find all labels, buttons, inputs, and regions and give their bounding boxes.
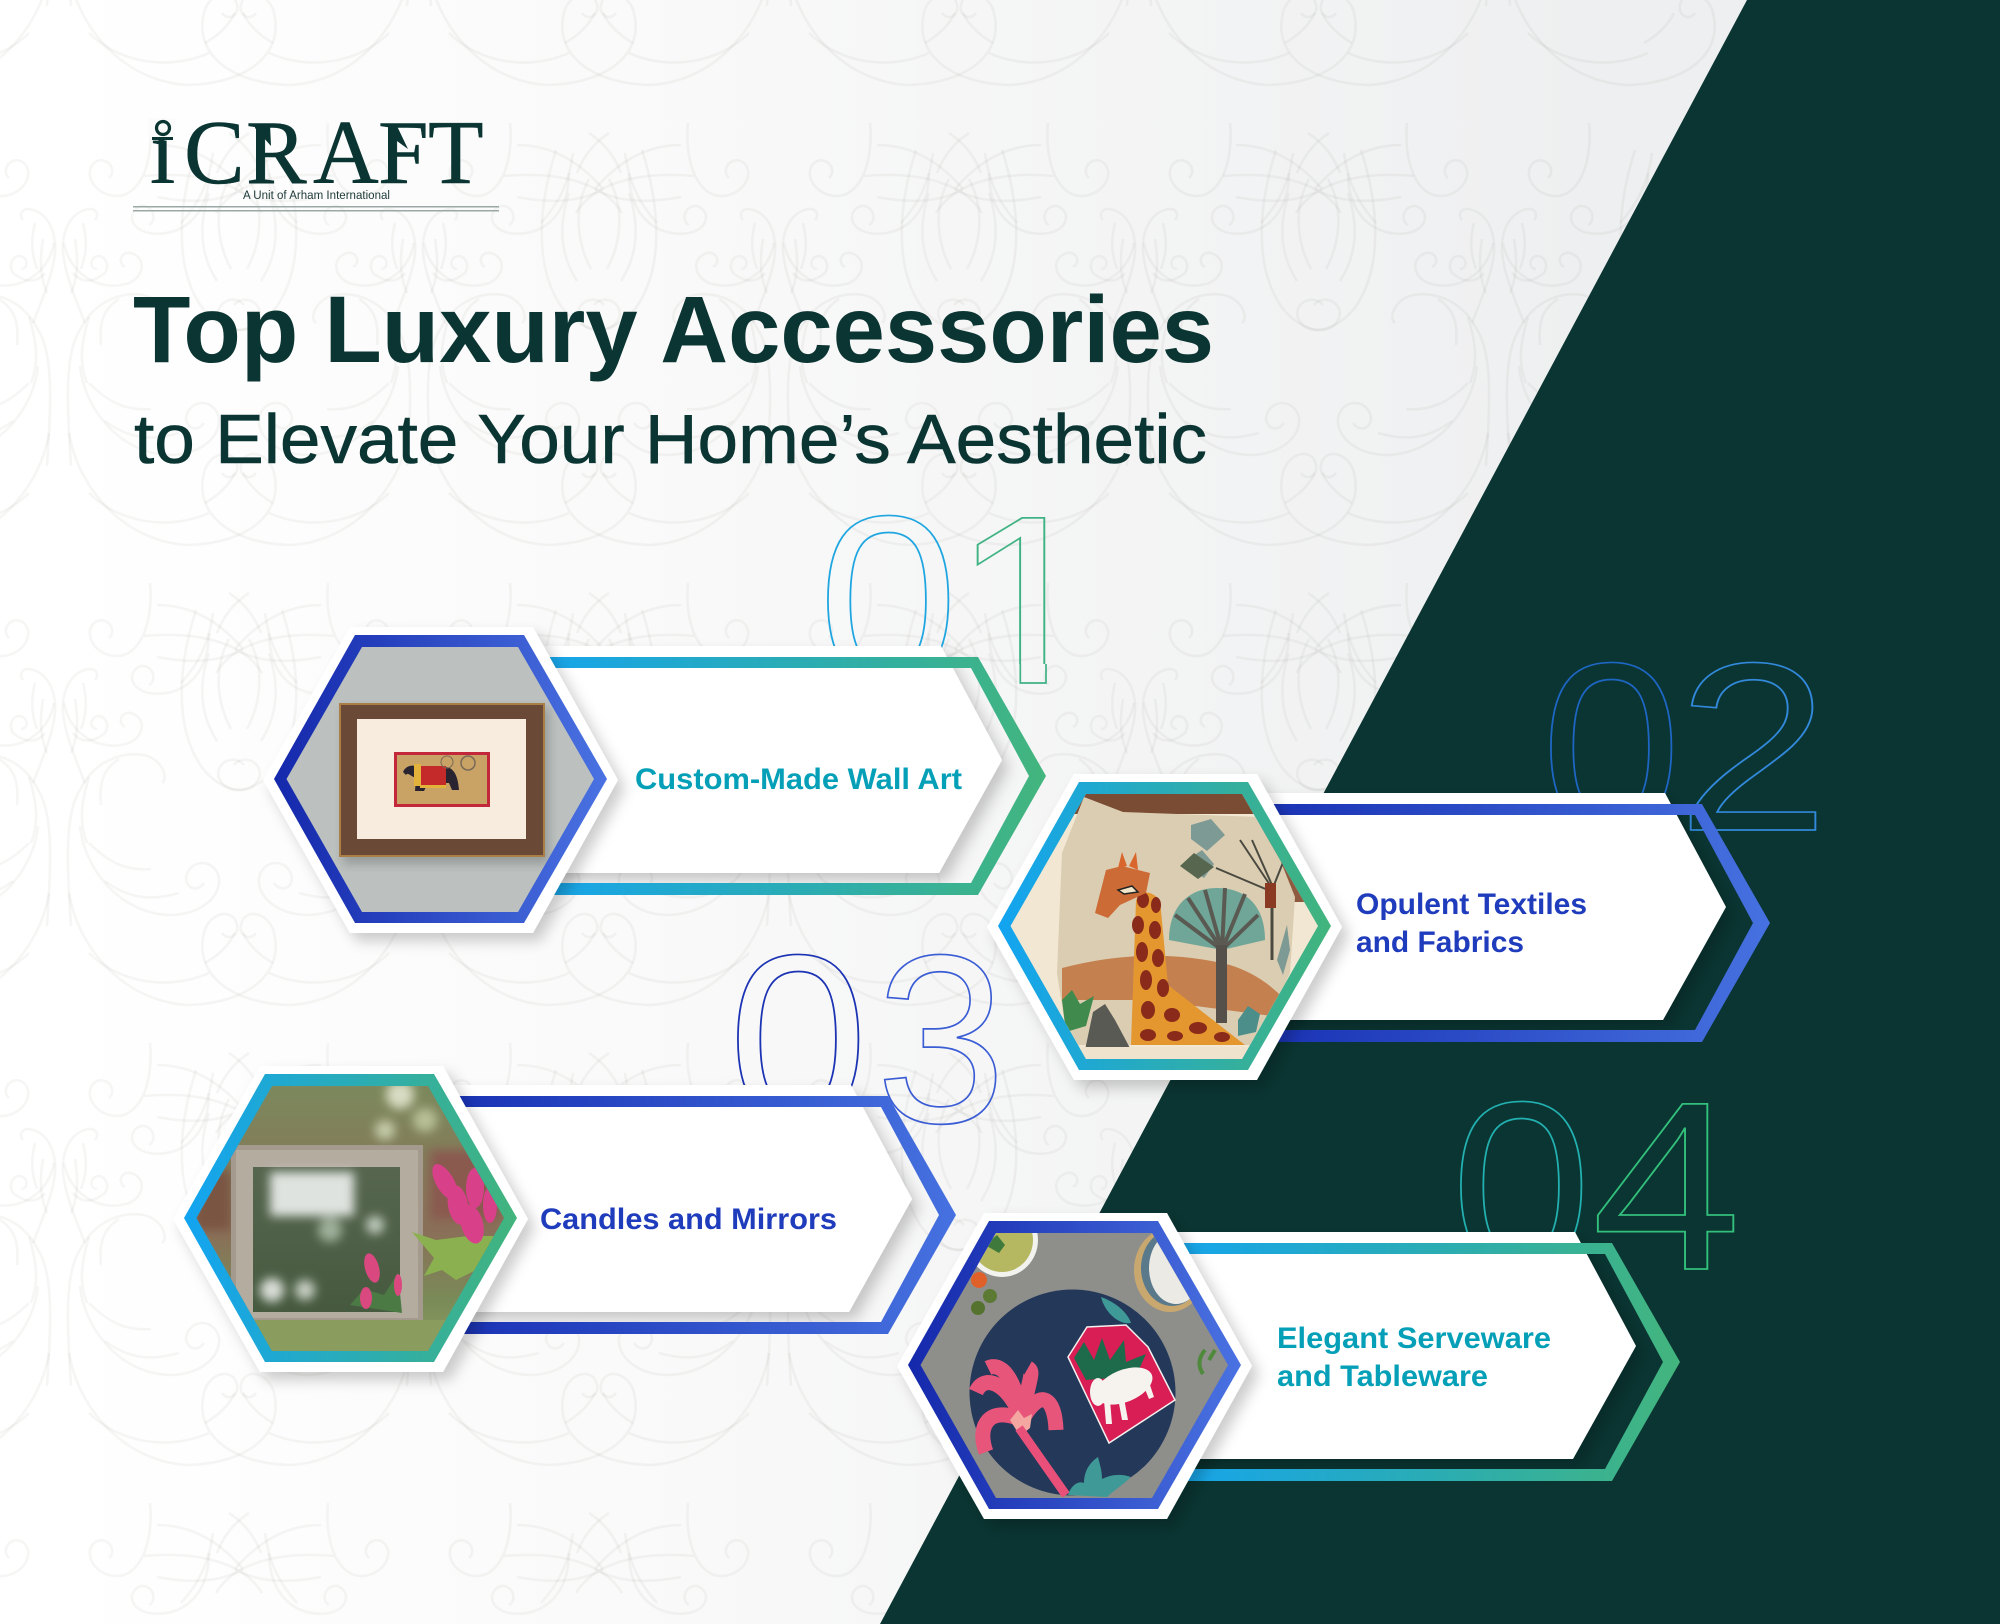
number 03: 0 — [728, 905, 868, 1174]
card 04: Elegant Serveware and Tableware — [898, 1100, 1734, 1522]
background: dark diagonal panel — [880, 0, 2000, 1624]
subtitle: to Elevate Your Home’s Aesthetic — [134, 400, 1207, 478]
number 01: 0 — [818, 466, 958, 735]
hexagon border — [987, 774, 1342, 1080]
chevron frame — [1174, 1243, 1680, 1481]
number 02 — [1541, 613, 1829, 882]
label: and Fabrics — [1356, 926, 1524, 959]
number 03 — [728, 905, 1006, 1174]
title: Top Luxury Accessories — [133, 277, 1214, 383]
number 02: 2 — [1677, 613, 1829, 881]
number 04 — [1451, 1051, 1741, 1321]
number 03: 3 — [876, 905, 1006, 1174]
chevron frame — [1264, 804, 1770, 1042]
hexagon border — [173, 1066, 528, 1372]
photo: giraffe cushion — [1010, 794, 1318, 1059]
card 03: Candles and Mirrors — [173, 905, 1006, 1372]
logo: iCRAFT: A Unit of Arham International — [243, 188, 390, 202]
hexagon border — [897, 1213, 1252, 1519]
number 04: 0 — [1451, 1052, 1591, 1321]
chevron frame — [540, 657, 1046, 895]
number 02: 0 — [1541, 613, 1681, 882]
card 01: Custom-Made Wall Art — [264, 514, 1047, 948]
label — [1277, 1322, 1551, 1393]
white label panel — [1264, 793, 1726, 1020]
label: Opulent Textiles — [1356, 888, 1587, 921]
chevron frame — [450, 1096, 956, 1334]
label: Candles and Mirrors — [540, 1203, 837, 1236]
number 01: 1 — [951, 466, 1104, 734]
label — [1356, 888, 1587, 959]
card 02: Opulent Textiles and Fabrics — [987, 613, 1829, 1080]
label: Custom-Made Wall Art — [635, 763, 962, 796]
white label panel — [1174, 1232, 1636, 1459]
photo: mirror in garden — [190, 1080, 510, 1356]
number 01 — [827, 514, 1047, 684]
label: Elegant Serveware — [1277, 1322, 1551, 1355]
label: and Tableware — [1277, 1360, 1488, 1393]
hexagon border — [263, 627, 618, 933]
photo: decorative placemat — [920, 1233, 1228, 1498]
photo: framed elephant art — [280, 640, 600, 920]
number 04: 4 — [1592, 1051, 1741, 1320]
logo: iCRAFT: iCRAFT — [150, 102, 484, 203]
white label panel — [540, 646, 1002, 873]
white label panel — [450, 1085, 912, 1312]
